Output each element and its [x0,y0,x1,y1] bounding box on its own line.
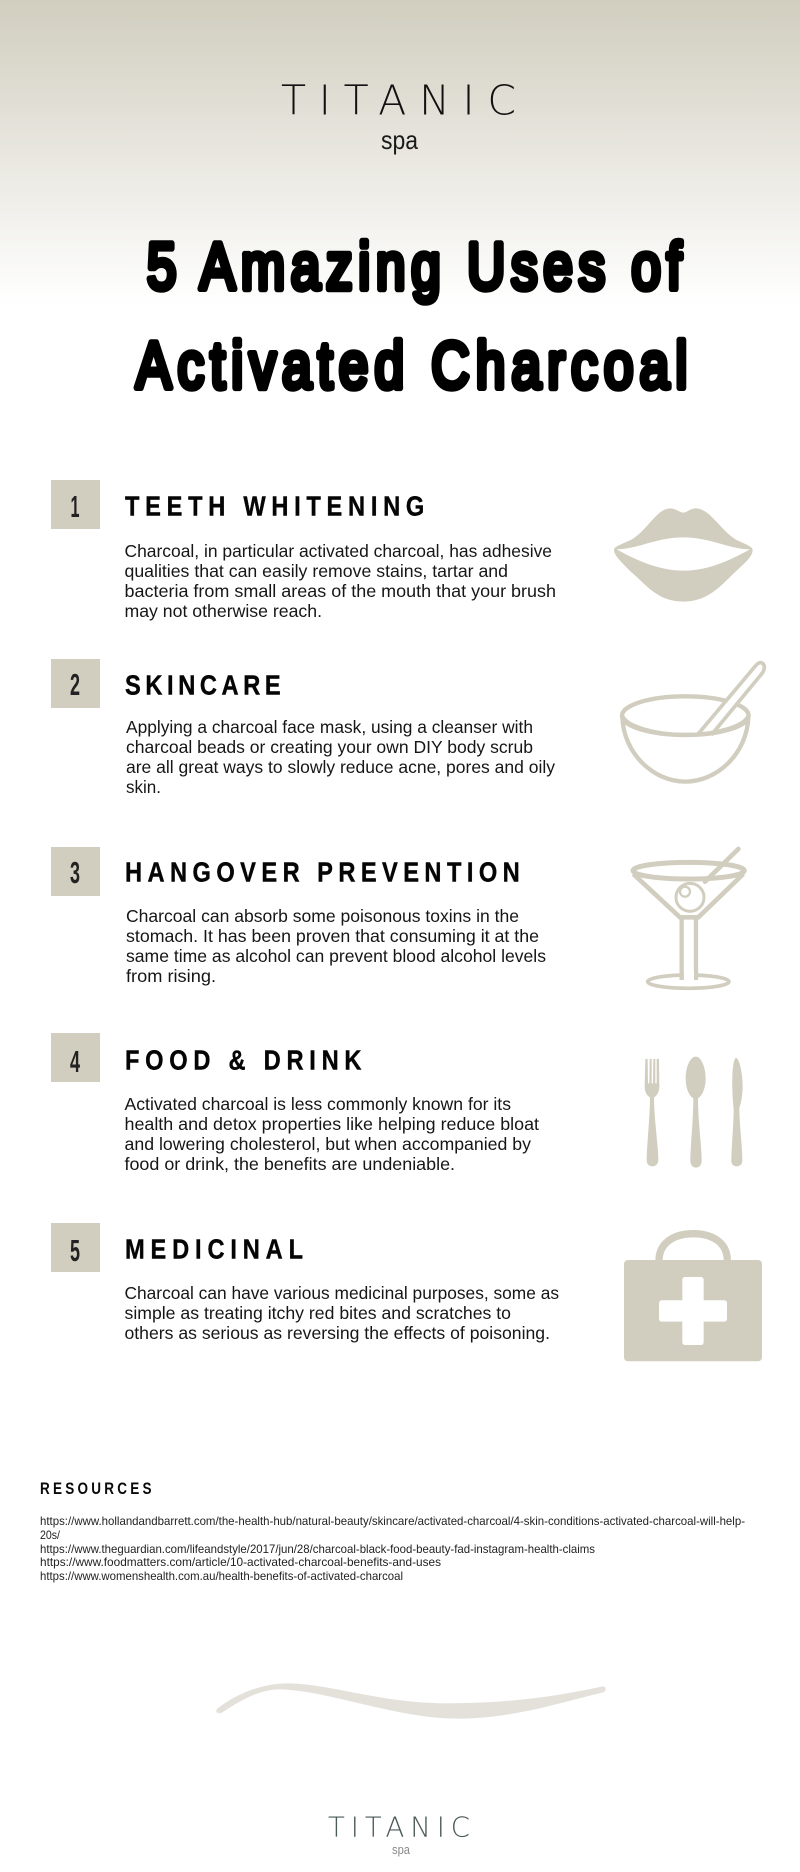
text block: food and drink: food or drink, the benefits are undeniable. [124,1154,455,1174]
icon: first aid kit [624,1234,762,1361]
icon: bowl and spatula [622,663,764,782]
panel: teeth whitening [51,480,753,621]
logo: Titanic spa [281,76,516,155]
header gradient background [0,0,800,305]
text block: teeth whitening: Charcoal, in particular activated charcoal, has adhesive [124,541,552,561]
text block: skincare: charcoal beads or creating your own DIY body scrub [126,737,533,757]
heading: skincare: SKINCARE [125,671,281,701]
text block: food and drink: and lowering cholesterol, but when accompanied by [124,1134,531,1154]
text block: resource links: 20s/ [40,1528,61,1542]
number badge 2 [51,659,100,708]
text block: food and drink: Activated charcoal is less commonly known for its [124,1094,511,1114]
number badge 4: 4 [70,1044,80,1079]
panel: hangover prevention [51,847,744,988]
text block: teeth whitening [124,541,556,621]
icon: martini glass [633,849,744,988]
title: Activated Charcoal [136,328,687,402]
number badge 4 [51,1033,100,1082]
icon: cutlery [645,1057,743,1168]
text block: resource links: https://www.hollandandbarrett.com/the-health-hub/natural-beauty/skincare/activated-charcoal/4-skin-conditions-activated-charcoal-will-help- [40,1514,745,1528]
footer logo: Titanic spa: TITANIC [328,1812,470,1844]
panel: skincare [51,659,764,797]
heading: resources: RESOURCES [40,1480,152,1498]
number badge 3: 3 [70,855,80,890]
logo: Titanic spa: spa [381,125,418,155]
title: 5 Amazing Uses of [147,229,682,303]
decorative swoosh [216,1683,606,1719]
text block: hangover prevention: Charcoal can absorb some poisonous toxins in the [126,906,519,926]
number badge 2: 2 [70,667,80,702]
text block: skincare: are all great ways to slowly reduce acne, pores and oily [126,757,555,777]
text block: food and drink: health and detox properties like helping reduce bloat [124,1114,539,1134]
text block: skincare: Applying a charcoal face mask, using a cleanser with [126,717,533,737]
logo: Titanic spa: TITANIC [281,76,516,124]
text block: hangover prevention: stomach. It has been proven that consuming it at the [126,926,539,946]
text block: hangover prevention: from rising. [126,966,216,986]
text block: resource links: https://www.womenshealth.com.au/health-benefits-of-activated-charcoal [40,1569,403,1583]
panel: resources [40,1480,745,1583]
text block: hangover prevention: same time as alcohol can prevent blood alcohol levels [126,946,546,966]
text block: medicinal: others as serious as reversing the effects of poisoning. [124,1323,550,1343]
text block: medicinal: Charcoal can have various medicinal purposes, some as [124,1283,559,1303]
heading: hangover prevention: HANGOVER PREVENTION [125,858,520,888]
text block: skincare: skin. [126,777,161,797]
text block: teeth whitening: may not otherwise reach. [124,601,322,621]
heading: food and drink: FOOD & DRINK [125,1046,362,1076]
icon: lips [614,508,753,602]
panel: food and drink [51,1033,743,1174]
number badge 5 [51,1223,100,1272]
number badge 5: 5 [70,1233,80,1268]
text block: resource links: https://www.foodmatters.com/article/10-activated-charcoal-benefits-and-uses [40,1555,441,1569]
number badge 1 [51,480,100,529]
text block: skincare [126,717,555,797]
title [136,229,687,402]
heading: medicinal: MEDICINAL [125,1235,303,1265]
text block: food and drink [124,1094,539,1174]
number badge 1: 1 [70,489,80,524]
text block: resource links: https://www.theguardian.com/lifeandstyle/2017/jun/28/charcoal-black-food-beauty-fad-instagram-health-claims [40,1542,595,1556]
number badge 3 [51,847,100,896]
text block: medicinal [124,1283,559,1343]
footer logo: Titanic spa: spa [392,1842,411,1857]
text block: teeth whitening: qualities that can easily remove stains, tartar and [124,561,508,581]
heading: teeth whitening: TEETH WHITENING [125,492,424,522]
text block: resource links [40,1514,745,1583]
panel: medicinal [51,1223,762,1361]
text block: teeth whitening: bacteria from small areas of the mouth that your brush [124,581,556,601]
text block: medicinal: simple as treating itchy red bites and scratches to [124,1303,511,1323]
text block: hangover prevention [126,906,546,986]
